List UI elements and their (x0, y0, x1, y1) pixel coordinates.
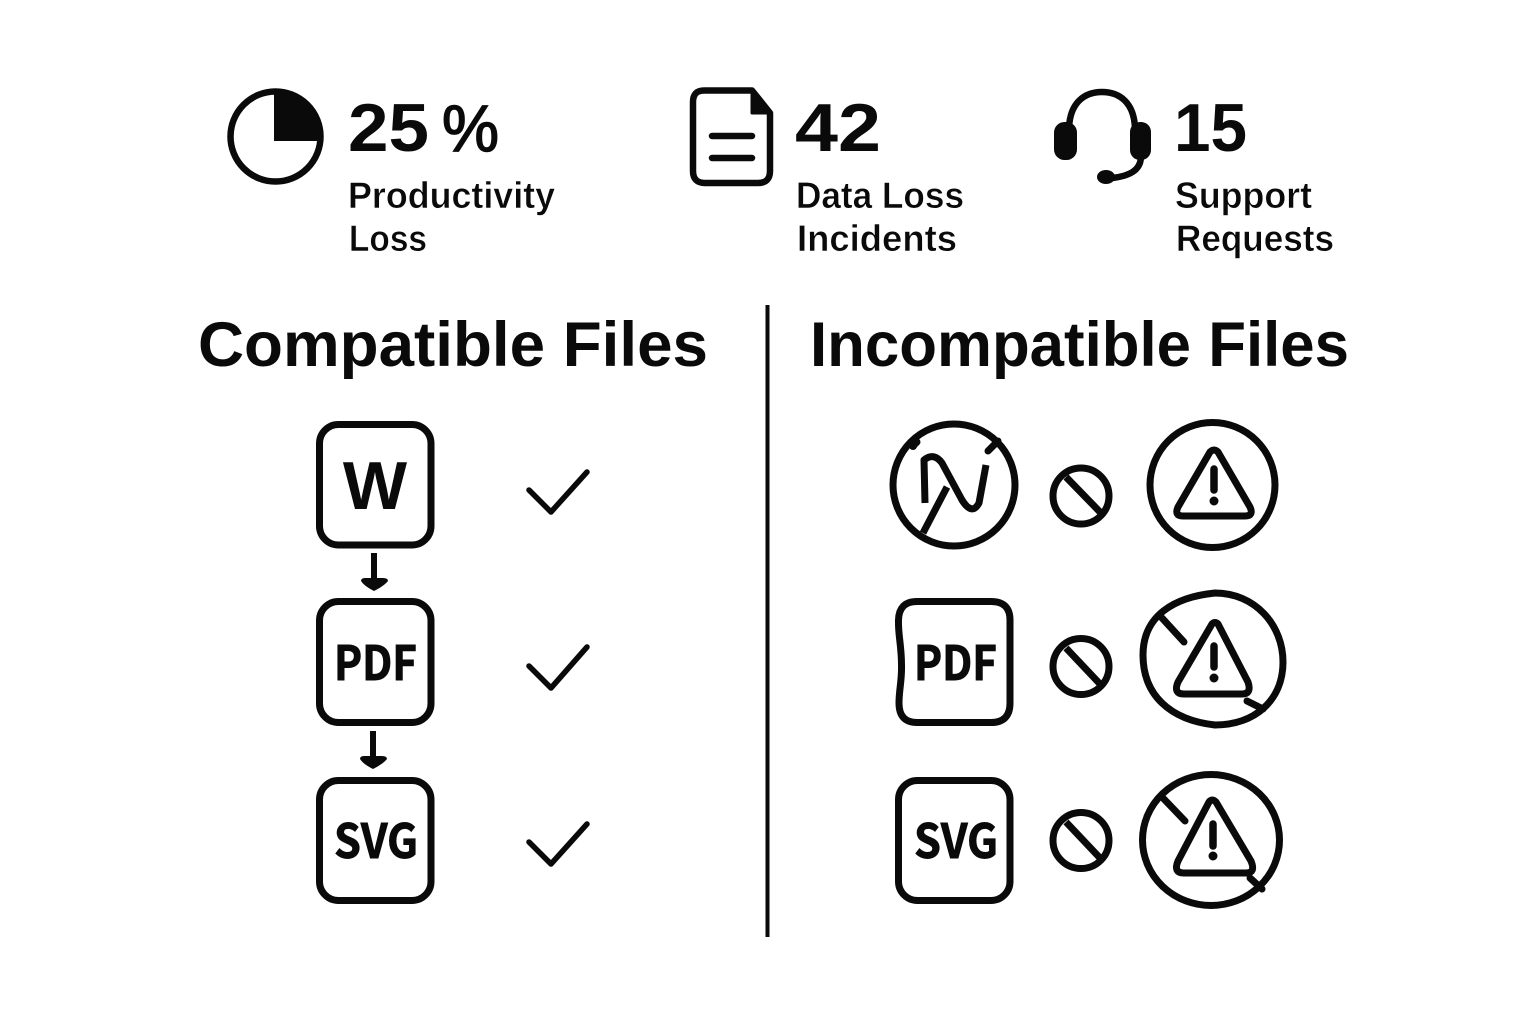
icon: crossed warning 2 (1142, 774, 1280, 906)
icon: pie chart (230, 90, 321, 182)
panel: incompatible files (893, 422, 1283, 906)
stat value 25% (348, 90, 499, 166)
panel: compatible files (320, 424, 587, 900)
stat label: Incidents (797, 218, 957, 259)
file icon: PDF incompatible (898, 602, 1010, 722)
file icon: SVG (320, 780, 431, 900)
icon: prohibited 1 (1053, 468, 1109, 524)
stat label: Requests (1176, 218, 1334, 259)
file icon: PDF (320, 602, 431, 722)
arrow: PDF to SVG (360, 731, 387, 769)
stat label: Support (1175, 175, 1312, 216)
file icon: W (320, 424, 431, 545)
stat value 25%: % (442, 91, 499, 165)
stat value 25%: 25 (348, 90, 429, 166)
file icon: SVG: SVG (334, 803, 418, 872)
stat label: Data Loss (796, 175, 964, 216)
heading: compatible files: Compatible Files (198, 310, 708, 380)
icon: warning in circle (1150, 422, 1275, 548)
stat value 42: 42 (795, 90, 881, 166)
stat label: Productivity (348, 175, 555, 216)
file icon: SVG incompatible: SVG (914, 803, 998, 872)
divider (766, 305, 770, 937)
stat: support requests (1054, 90, 1334, 259)
file icon: SVG incompatible (898, 780, 1010, 900)
icon: check 2 (529, 647, 587, 688)
icon: crossed warning 1 (1143, 593, 1283, 725)
icon: headset (1054, 92, 1151, 184)
file icon: PDF: PDF (334, 625, 417, 694)
icon: document (693, 90, 770, 183)
icon: prohibited 2 (1053, 638, 1109, 694)
heading: incompatible files: Incompatible Files (810, 310, 1349, 380)
stat label: Loss (349, 218, 427, 259)
file icon: PDF incompatible: PDF (914, 625, 997, 694)
icon: crossed N circle (893, 424, 1015, 546)
icon: check 1 (529, 472, 587, 512)
stat label (348, 175, 555, 259)
icon: prohibited 3 (1053, 812, 1109, 868)
stat: data loss incidents (693, 90, 964, 259)
arrow: W to PDF (361, 553, 388, 591)
stat value 15: 15 (1174, 90, 1247, 166)
stat: productivity loss (230, 90, 555, 259)
stat label (796, 175, 964, 259)
file icon: W: W (343, 448, 408, 524)
stat label (1175, 175, 1334, 259)
icon: check 3 (529, 824, 587, 864)
